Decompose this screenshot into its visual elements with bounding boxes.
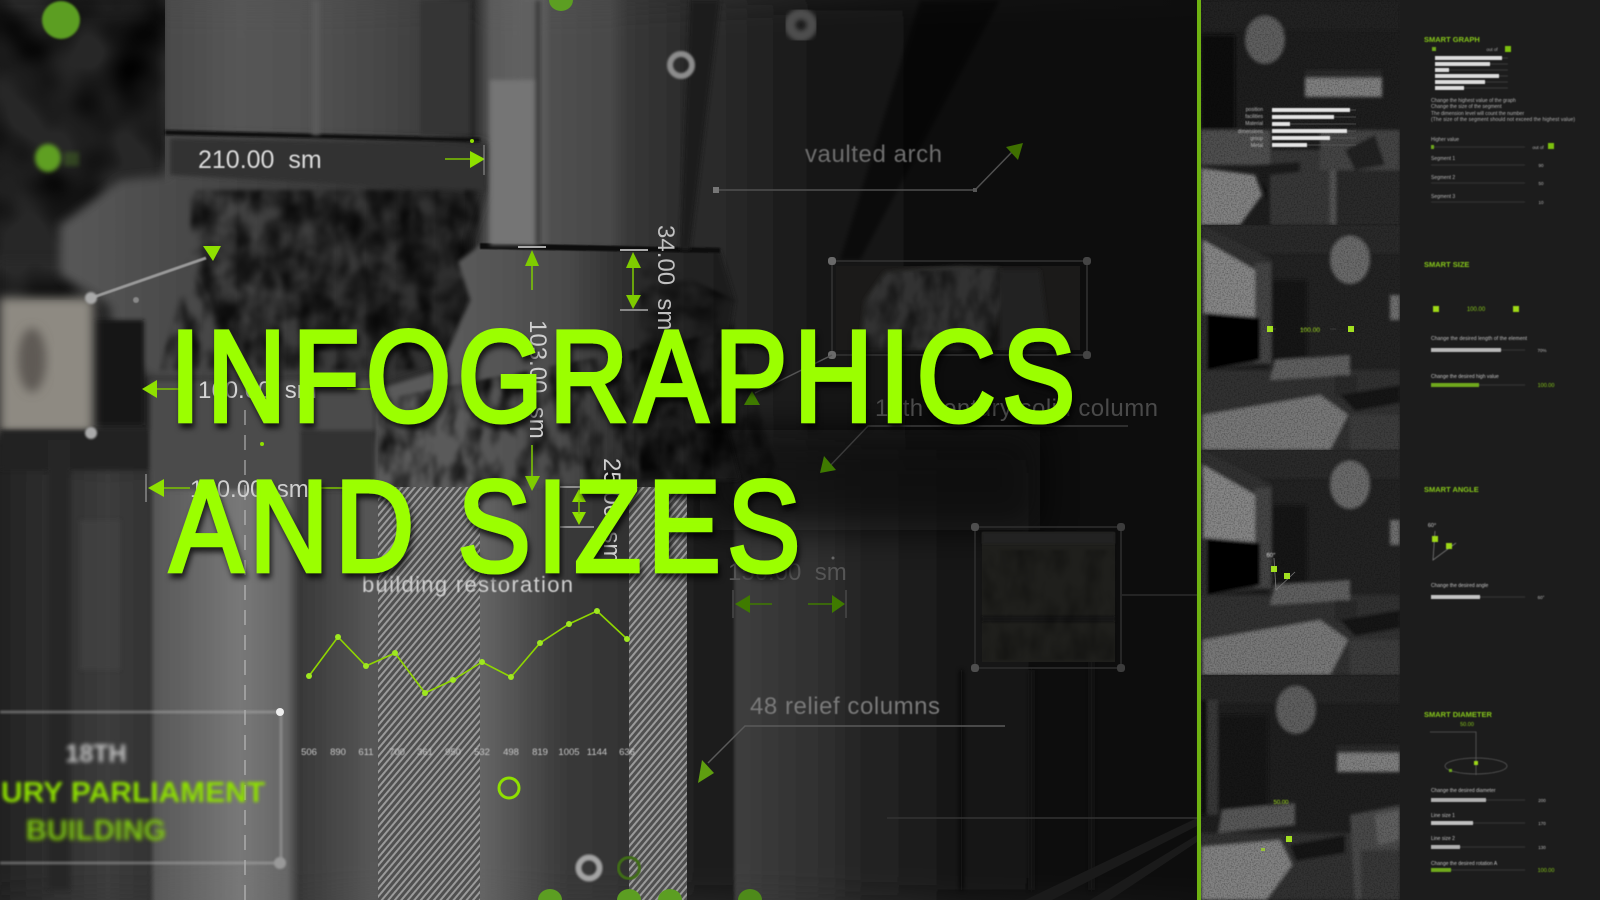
image box: plan [971,523,1197,672]
settings: smart size: SMART SIZE [1424,260,1469,269]
callout arrow: capital leaf [85,246,221,439]
settings: smart graph: Higher value [1431,137,1459,143]
label: vaulted arch: vaulted arch [805,141,942,168]
dimension: 210.00 sm [198,145,485,175]
stone capital left [60,130,487,385]
panel: smart size interior [1201,225,1400,450]
blurred callout: 18th century parliament building: 18TH [65,740,127,768]
label: vaulted arch [713,141,1023,193]
dashed measure line [244,410,246,900]
settings: smart size [1424,260,1554,389]
settings: smart diameter [1424,710,1554,874]
label: 18th century column: 18th century solid column [875,395,1158,422]
settings: smart size: 100.00 [1538,383,1554,389]
panel: settings column [1400,0,1600,900]
dimension: 160.00 sm [142,377,385,404]
bar chart on interior: dimensions [1238,129,1263,135]
chart value labels: 819 [532,747,548,758]
label: 48 relief columns: 48 relief columns [750,693,940,720]
bar chart on interior: group [1250,136,1263,142]
settings: smart size: Change the desired length of the element [1431,336,1528,342]
lower column shadows [0,380,1093,890]
chart value labels: 506 [301,747,317,758]
settings: smart angle [1424,485,1545,600]
panel: smart graph interior [1201,0,1400,225]
settings: smart angle: 60° [1428,523,1436,529]
size marker on interior: 100.00 [1300,327,1320,334]
settings: smart diameter: Line size 1 [1431,813,1455,819]
blurred callout: 18th century parliament building: BUILDING [26,815,166,847]
chart value labels: 890 [330,747,346,758]
angle marker on interior: 60° [1266,553,1276,559]
bar chart on interior: position [1246,107,1263,113]
panel: smart diameter interior [1201,675,1400,900]
chart value labels [301,747,635,758]
label: 18th century column [820,395,1158,473]
chart value labels: 1005 [558,747,580,758]
settings: smart size: 100.00 [1467,307,1486,313]
dimension: 150.00 sm [728,556,847,618]
blurred callout: 18th century parliament building [0,708,286,869]
settings: smart angle: Change the desired angle [1431,583,1488,589]
settings: smart angle: SMART ANGLE [1424,485,1479,494]
bar chart on interior: Material [1245,121,1263,127]
settings: smart diameter: 200 [1538,798,1546,803]
settings: smart graph: 90 [1538,163,1544,168]
line chart [301,608,635,758]
settings: smart diameter: SMART DIAMETER [1424,710,1492,719]
settings: smart diameter: 50.00 [1460,722,1474,728]
stair diagonals lower right [1025,818,1197,900]
title [170,304,1082,599]
dimension: 120.00 sm [146,474,355,503]
bar chart on interior: facilities [1245,114,1263,120]
settings: smart graph: Change the highest value of the graph [1431,98,1516,104]
blurred callout: 18th century parliament building: URY PARLIAMENT [1,777,265,809]
settings: smart graph: The dimension level will count the number [1431,111,1524,117]
chart value labels: 532 [474,747,490,758]
diameter marker on interior [1261,800,1292,851]
label: 48 relief columns [698,693,1005,783]
panel: architectural photo background [0,0,1197,900]
chart value labels: 498 [503,747,519,758]
dimension: 210.00 sm: 210.00 sm [198,146,322,174]
size marker on interior [1267,326,1354,334]
chart value labels: 611 [358,747,374,758]
title: INFOGRAPHICS [170,304,1082,449]
settings: smart size: Change the desired high value [1431,374,1499,380]
settings: smart diameter: Change the desired rotation A [1431,861,1498,867]
chart value labels: 700 [389,747,405,758]
settings: smart diameter: 170 [1538,821,1546,826]
settings: smart graph: out of [1486,47,1498,52]
bar chart on interior: Metal [1251,143,1263,149]
settings: smart graph [1424,35,1575,205]
faint guide line [887,817,1197,819]
angle marker on interior [1266,553,1295,590]
dimension: 120.00 sm: 120.00 sm [190,476,309,503]
settings: smart graph: out of [1532,145,1544,150]
chart value labels: 950 [445,747,461,758]
dimension: 25.00 sm [560,458,625,563]
dimension: 25.00 sm: 25.00 sm [598,458,625,563]
settings: smart graph: (The size of the segment should not exceed the highest value) [1431,117,1575,123]
panel: smart angle interior [1201,450,1400,675]
image box: relief [744,257,1091,405]
dimension: 160.00 sm: 160.00 sm [198,377,317,404]
settings: smart diameter: Change the desired diameter [1431,788,1496,794]
bar chart on interior [1238,107,1356,149]
title: AND SIZES [170,454,807,599]
chart value labels: 361 [417,747,433,758]
settings: smart angle: 60° [1538,595,1545,600]
settings: smart graph: Segment 1 [1431,156,1455,162]
blurred stone block [0,298,144,433]
settings: smart diameter: Line size 2 [1431,836,1455,842]
dimension: 34.00 sm [620,225,679,330]
settings: smart graph: Change the size of the segment [1431,104,1502,110]
settings: smart diameter: 100.00 [1538,868,1554,874]
dimension: 103.00 sm arrows [518,247,551,491]
dimension: 103.00 sm arrows: 103.00 sm [524,320,551,439]
settings: smart graph: SMART GRAPH [1424,35,1480,44]
green and grey markers [35,0,812,900]
chart value labels: 1144 [587,747,607,758]
settings: smart graph: 50 [1538,181,1544,186]
column shafts top details [312,0,1000,260]
settings: smart diameter: 130 [1538,845,1546,850]
dimension: 150.00 sm: 150.00 sm [728,559,847,586]
hatched columns [378,487,687,900]
settings: smart graph: 10 [1538,200,1544,205]
label: building restoration: building restoration [362,572,573,597]
divider: green vertical bar [1197,0,1201,900]
settings: smart graph: Segment 2 [1431,175,1455,181]
dimension: 34.00 sm: 34.00 sm [652,225,679,330]
settings: smart size: 70% [1537,348,1547,353]
chart value labels: 636 [619,747,635,758]
stone capital right [375,243,780,490]
diameter marker on interior: 50.00 [1273,800,1289,806]
settings: smart graph: Segment 3 [1431,194,1455,200]
